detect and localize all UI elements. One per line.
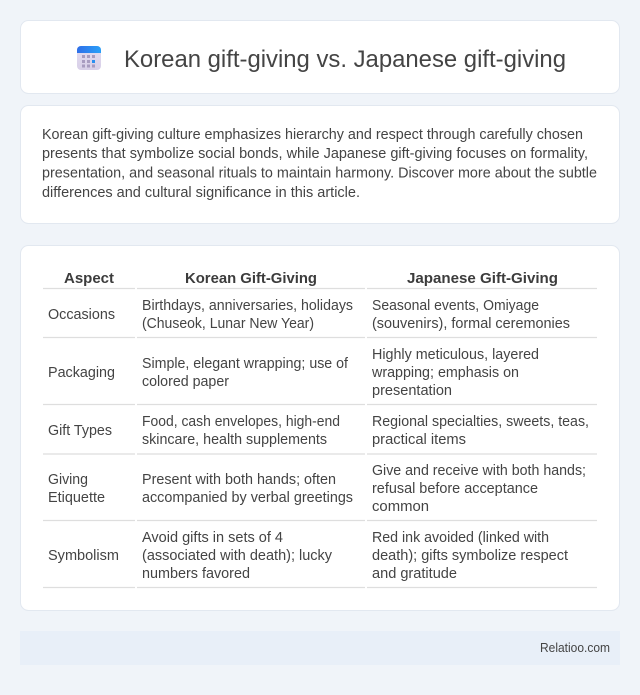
panel: introduction xyxy=(20,106,620,224)
footer xyxy=(20,631,620,665)
row: occasions xyxy=(48,298,570,332)
table header: Japanese Gift-Giving xyxy=(407,270,558,287)
row: symbolism: (associated with death); lucky xyxy=(142,548,333,564)
table header: Korean Gift-Giving xyxy=(185,270,317,287)
row: symbolism: numbers favored xyxy=(142,566,250,582)
title: Korean gift-giving vs. Japanese gift-giving xyxy=(124,46,566,73)
row: packaging: wrapping; emphasis on xyxy=(371,365,519,381)
row: occasions: (souvenirs), formal ceremonies xyxy=(372,316,570,332)
row: symbolism: and gratitude xyxy=(372,566,457,582)
row: packaging: Simple, elegant wrapping; use of xyxy=(142,356,349,372)
table header: Aspect xyxy=(64,270,114,287)
row: giving etiquette xyxy=(48,463,586,515)
row: gift types: Food, cash envelopes, high-end xyxy=(142,414,340,430)
intro text: differences and cultural significance in this article. xyxy=(42,185,360,201)
intro text: Korean gift-giving culture emphasizes hierarchy and respect through carefully chosen xyxy=(42,127,583,143)
panel: comparison table xyxy=(20,246,620,610)
row: packaging: presentation xyxy=(372,383,452,399)
row: gift types xyxy=(48,414,589,448)
row: giving etiquette: Give and receive with both hands; xyxy=(372,463,586,479)
row: packaging xyxy=(48,347,539,399)
row: giving etiquette: Giving xyxy=(48,472,88,488)
row: giving etiquette: refusal before acceptance xyxy=(372,481,538,497)
row: occasions: Occasions xyxy=(48,307,115,323)
row: occasions: Birthdays, anniversaries, holidays xyxy=(142,298,353,314)
intro text xyxy=(42,127,597,201)
row: giving etiquette: accompanied by verbal greetings xyxy=(142,490,353,506)
row: symbolism: Symbolism xyxy=(48,548,119,564)
row: packaging: colored paper xyxy=(142,374,229,390)
row: occasions: Seasonal events, Omiyage xyxy=(372,298,539,314)
icon: calendar xyxy=(77,46,101,70)
row: symbolism: Red ink avoided (linked with xyxy=(372,530,549,546)
row: packaging: Highly meticulous, layered xyxy=(372,347,539,363)
row: symbolism: Avoid gifts in sets of 4 xyxy=(142,530,283,546)
row: symbolism: death); gifts symbolize respect xyxy=(372,548,568,564)
row: giving etiquette: common xyxy=(372,499,429,515)
intro text: presentation, and seasonal rituals to maintain harmony. Discover more about the subtle xyxy=(42,166,597,182)
row: giving etiquette: Etiquette xyxy=(48,490,105,506)
row: symbolism xyxy=(48,530,568,582)
row: gift types: practical items xyxy=(372,432,466,448)
table header xyxy=(64,270,558,287)
row: gift types: skincare, health supplements xyxy=(142,432,327,448)
row: gift types: Regional specialties, sweets, teas, xyxy=(372,414,589,430)
row: occasions: (Chuseok, Lunar New Year) xyxy=(142,316,314,332)
panel: title header xyxy=(20,20,620,94)
row: packaging: Packaging xyxy=(48,365,115,381)
row: giving etiquette: Present with both hands; often xyxy=(142,472,336,488)
footer credit: Relatioo.com xyxy=(540,641,610,655)
row: gift types: Gift Types xyxy=(48,423,112,439)
intro text: presents that symbolize social bonds, while Japanese gift-giving focuses on formality, xyxy=(42,146,588,162)
